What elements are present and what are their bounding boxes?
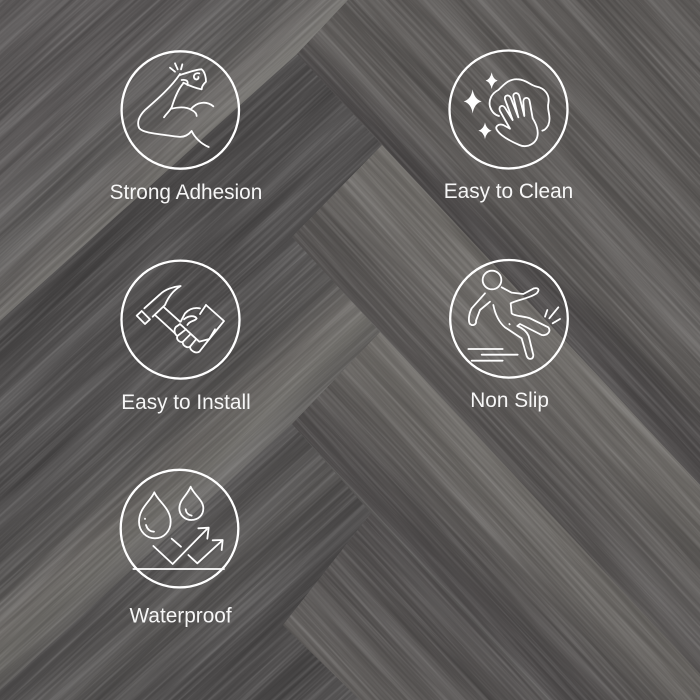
plank: third right [292,332,700,700]
feature: Easy to Install [121,261,251,414]
icon: hand wiping with cloth [464,72,550,146]
label: Easy to Install: Easy to Install [121,391,251,414]
feature: Strong Adhesion [110,51,262,204]
plank: upper left [0,0,348,321]
feature: Non Slip [450,260,568,412]
plank: upper right [297,0,700,485]
label: Easy to Clean: Easy to Clean [444,180,573,203]
icon: slipping person [468,271,560,361]
icon ring: Waterproof [121,470,238,587]
wood grain: left-leaning planks [0,0,382,700]
plank: lower left [0,424,371,700]
label: Strong Adhesion: Strong Adhesion [110,181,262,204]
plank: top right corner [348,0,700,375]
icon ring: Easy to Install [122,261,240,379]
icon ring: Easy to Clean [450,50,568,168]
icon: water drops repelled from surface [133,487,224,569]
feature: Easy to Clean [444,50,573,203]
label: Non Slip: Non Slip [470,389,549,412]
icon ring: Strong Adhesion [122,51,239,169]
plank: fourth right [283,513,546,700]
plank: dark left [0,54,382,503]
wood grain: right-leaning planks [283,0,700,700]
label: Waterproof: Waterproof [130,604,232,628]
icon: hand holding hammer [137,286,224,352]
plank: second right [292,145,700,674]
icon: flexed bicep [138,63,213,147]
plank: bottom wedge [200,625,360,700]
plank: middle left with light strip [0,237,380,690]
icon ring: Non Slip [450,260,568,378]
feature: Waterproof [121,470,238,628]
